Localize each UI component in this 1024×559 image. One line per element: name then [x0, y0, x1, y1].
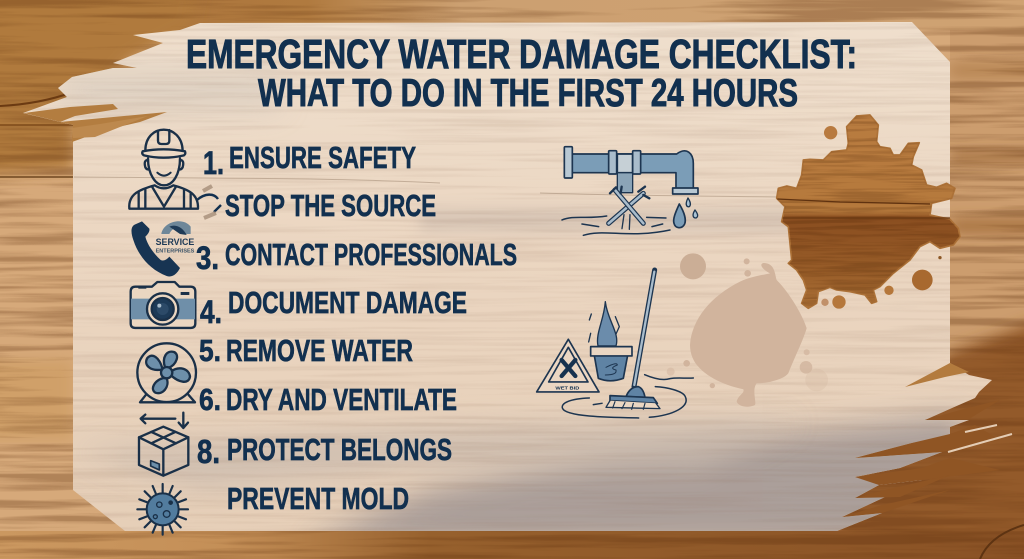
icon: leaking pipe and wrenches: [562, 147, 698, 235]
item 1: 1.: [203, 145, 224, 181]
icon: phone with service badge: SERVICE: [156, 237, 194, 247]
item 4: [200, 285, 467, 330]
icon: wet floor sign, bucket and mop: WET BID: [555, 385, 580, 390]
item 8: [197, 432, 452, 470]
item prevent mold: PREVENT MOLD: [227, 481, 409, 516]
icon: fan: [137, 343, 196, 402]
item 1: [203, 140, 416, 181]
item 5: [199, 333, 413, 368]
item 3: [196, 237, 517, 276]
icon: phone with service badge: ENTERPRISES: [156, 248, 195, 254]
item 6: [199, 382, 457, 417]
item 4: 4.: [200, 294, 222, 330]
water stain: faded: [667, 253, 828, 407]
icon: mold: [137, 484, 188, 535]
item 5: REMOVE WATER: [226, 333, 413, 368]
item 6: 6.: [199, 382, 221, 417]
item 8: 8.: [197, 433, 220, 470]
item 6: DRY AND VENTILATE: [226, 382, 457, 417]
water stain: dark: [776, 114, 961, 310]
item 2 with worn number: [197, 186, 436, 223]
checklist: [196, 140, 517, 516]
item 3: CONTACT PROFESSIONALS: [225, 237, 517, 272]
icon: box: [139, 427, 188, 476]
icon: arrows: [141, 413, 188, 428]
item 1: ENSURE SAFETY: [229, 140, 416, 175]
brush streaks: bottom right: [842, 363, 1012, 517]
icon: camera: [131, 282, 195, 328]
item 2 with worn number: STOP THE SOURCE: [225, 188, 436, 223]
item 5: 5.: [199, 333, 221, 368]
item 8: PROTECT BELONGS: [227, 432, 452, 467]
icon: phone with service badge: [131, 221, 195, 276]
title: [186, 31, 857, 115]
brush streaks: top left: [24, 104, 167, 142]
item 3: 3.: [196, 240, 219, 276]
item 4: DOCUMENT DAMAGE: [228, 285, 467, 320]
icon: worker: [129, 130, 198, 209]
title: WHAT TO DO IN THE FIRST 24 HOURS: [258, 72, 798, 115]
icon: wet floor sign, bucket and mop: [537, 270, 693, 418]
